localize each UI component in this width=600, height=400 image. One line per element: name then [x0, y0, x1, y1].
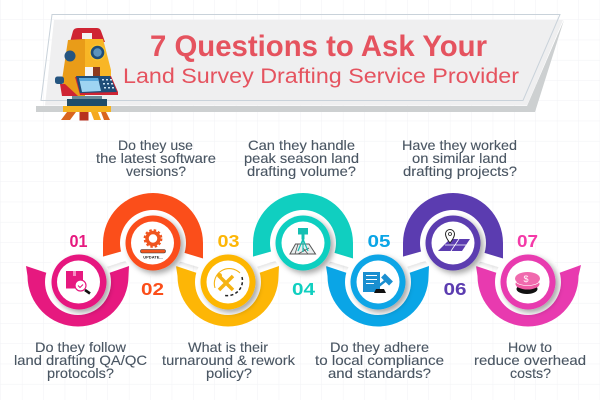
heading line 2: Land Survey Drafting Service Provider	[123, 65, 519, 88]
step 04 medallion	[270, 210, 336, 276]
step 02 arc	[103, 193, 203, 259]
step 07 medallion	[495, 249, 561, 315]
question 03	[162, 339, 296, 381]
question 07: How to	[508, 339, 552, 355]
question 07	[474, 339, 586, 381]
icon: gear with update bar: UPDATE...	[143, 254, 163, 260]
question 01: Do they follow	[35, 339, 127, 355]
question 03: What is their	[188, 339, 268, 355]
question 05: and standards?	[328, 365, 431, 381]
step 06 arc	[403, 193, 503, 259]
question 04: Can they handle	[248, 137, 355, 153]
icon: document and gavel	[363, 272, 391, 293]
question 03: policy?	[206, 365, 252, 381]
step 03 arc	[176, 266, 279, 326]
question 03: turnaround & rework	[162, 352, 296, 368]
question 04: drafting volume?	[247, 163, 356, 179]
step 01 medallion	[45, 249, 111, 315]
white connector ribbons	[98, 249, 508, 269]
question 05: to local compliance	[315, 352, 444, 368]
number 07: 07	[517, 231, 538, 251]
step 04 arc	[253, 193, 353, 259]
number 05: 05	[368, 231, 391, 251]
icon: total station survey instrument	[55, 28, 118, 120]
title banner	[36, 14, 564, 112]
question 01	[14, 339, 147, 381]
step 03 medallion	[195, 249, 261, 315]
step 07 arc	[476, 265, 581, 326]
question 01: land drafting QA/QC	[14, 352, 147, 368]
question 06: Have they worked	[402, 137, 517, 153]
question 02: Do they use	[118, 137, 193, 153]
question 05	[315, 339, 444, 381]
question 02: versions?	[126, 163, 186, 179]
number 03: 03	[218, 231, 240, 251]
question 04: peak season land	[244, 150, 359, 166]
question 02: the latest software	[96, 150, 216, 166]
step 02 medallion	[120, 210, 186, 276]
question 05: Do they adhere	[330, 339, 429, 355]
step 05 arc	[326, 266, 429, 326]
icon: wrench and screwdriver with cycle	[214, 269, 242, 296]
icon: location pin over land plot	[438, 230, 470, 251]
step 06 medallion	[420, 210, 486, 276]
icon: survey tripod on map	[290, 228, 316, 254]
question 07: costs?	[510, 365, 551, 381]
question 06: on similar land	[412, 150, 507, 166]
question 04	[244, 137, 359, 179]
number 02: 02	[141, 279, 164, 299]
step 05 medallion	[345, 249, 411, 315]
question 06	[402, 137, 517, 179]
number 06: 06	[444, 279, 467, 299]
question 07: reduce overhead	[474, 352, 586, 368]
heading line 1: 7 Questions to Ask Your	[150, 30, 487, 63]
icon: package with check and magnifier	[66, 271, 90, 294]
icon: stack of coins: $	[523, 274, 529, 284]
question 01: protocols?	[47, 365, 114, 381]
number 01: 01	[70, 231, 88, 251]
question 06: drafting projects?	[403, 163, 517, 179]
question 02	[96, 137, 216, 179]
number 04: 04	[292, 279, 315, 299]
step 01 arc	[26, 266, 129, 326]
title text	[123, 30, 519, 88]
